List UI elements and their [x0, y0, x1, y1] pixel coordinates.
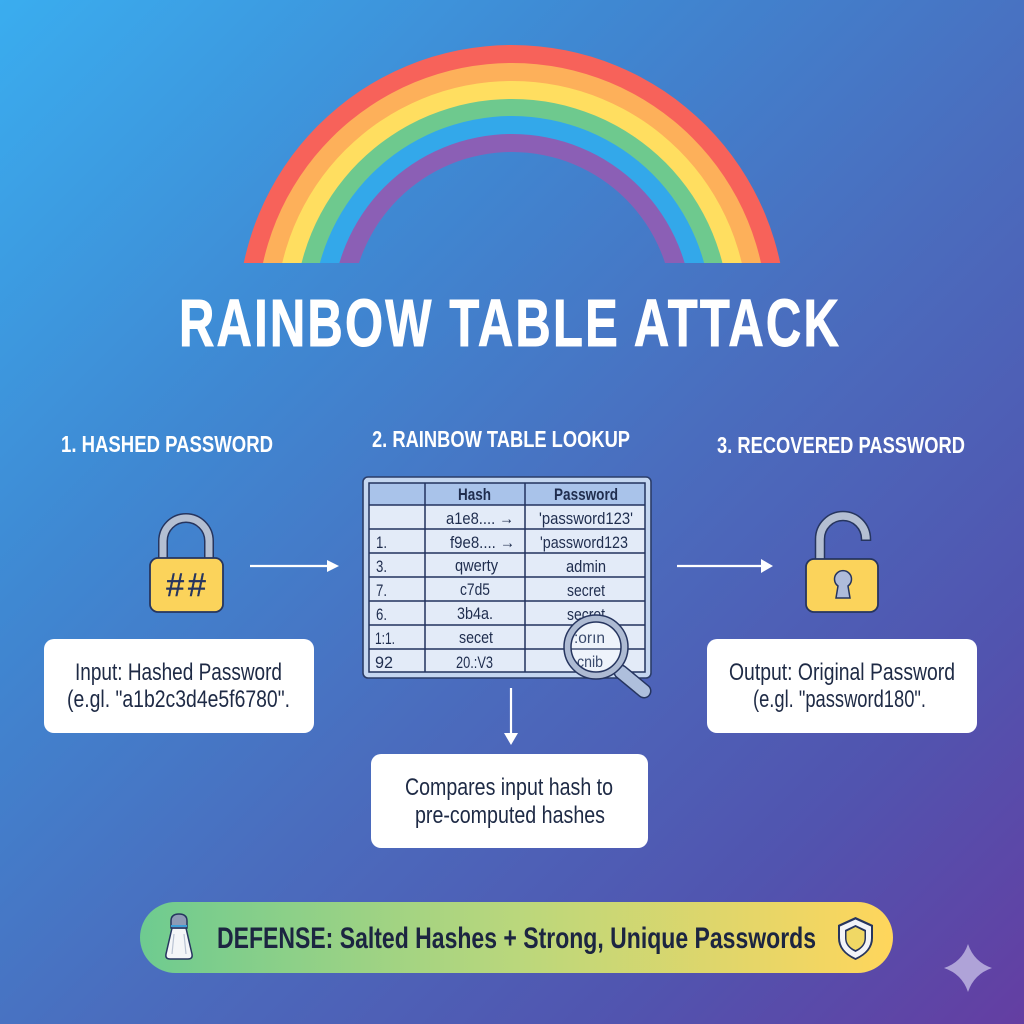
icon: locked padlock with hash: ## — [166, 567, 210, 603]
rainbow lookup table: 3b4a. — [457, 604, 493, 623]
rainbow lookup table: Hash — [458, 485, 491, 504]
output callout: Output: Original Password — [729, 659, 955, 686]
rainbow lookup table: a1e8.... → — [446, 509, 514, 528]
input callout — [44, 639, 314, 733]
rainbow lookup table: 1:1. — [375, 629, 395, 648]
input callout: Input: Hashed Password — [75, 659, 282, 686]
output callout — [707, 639, 977, 733]
comparison callout — [371, 754, 648, 848]
rainbow lookup table: secet — [459, 628, 493, 647]
step 2 heading: 2. RAINBOW TABLE LOOKUP — [372, 426, 630, 452]
defense text: DEFENSE: Salted Hashes + Strong, Unique Passwords — [217, 922, 816, 955]
icon: locked padlock with hash — [150, 518, 223, 612]
icon: open padlock with keyhole — [806, 516, 878, 612]
icon: magnifying glass: :orın — [574, 630, 605, 647]
arrow: table to recovered password — [677, 559, 773, 573]
output callout: (e.gl. "password180". — [753, 686, 926, 713]
input callout: (e.gl. "a1b2c3d4e5f6780". — [67, 686, 290, 713]
rainbow lookup table: 1. — [376, 533, 387, 552]
icon: magnifying glass — [560, 618, 644, 691]
rainbow lookup table: c7d5 — [460, 580, 490, 599]
table header row — [369, 483, 645, 505]
rainbow lookup table: 7. — [376, 581, 387, 600]
sparkle watermark — [944, 944, 992, 992]
rainbow lookup table: 'password123 — [540, 533, 628, 552]
defense banner — [140, 902, 893, 973]
rainbow lookup table: 3. — [376, 557, 387, 576]
rainbow lookup table: secret — [567, 605, 605, 624]
rainbow lookup table: admin — [566, 557, 606, 576]
icon: magnifying glass: cnib — [577, 654, 603, 671]
icon: shield — [838, 917, 873, 960]
rainbow lookup table — [363, 477, 651, 678]
rainbow — [244, 45, 780, 263]
icon: salt shaker — [166, 914, 192, 959]
rainbow lookup table: qwerty — [455, 556, 498, 575]
rainbow lookup table: f9e8.... → — [450, 533, 515, 552]
comparison callout: pre-computed hashes — [415, 802, 605, 829]
step 1 heading: 1. HASHED PASSWORD — [61, 431, 273, 457]
rainbow lookup table: 'password123' — [539, 509, 633, 528]
comparison callout: Compares input hash to — [405, 774, 613, 801]
rainbow lookup table: 20.:V3 — [456, 653, 493, 672]
rainbow lookup table: secret — [567, 581, 605, 600]
arrow: table to comparison note — [504, 688, 518, 745]
arrow: hash to table — [250, 560, 339, 572]
rainbow lookup table: Password — [554, 485, 618, 504]
step 3 heading: 3. RECOVERED PASSWORD — [717, 432, 965, 458]
rainbow lookup table: 92 — [375, 653, 393, 672]
rainbow lookup table: 6. — [376, 605, 387, 624]
